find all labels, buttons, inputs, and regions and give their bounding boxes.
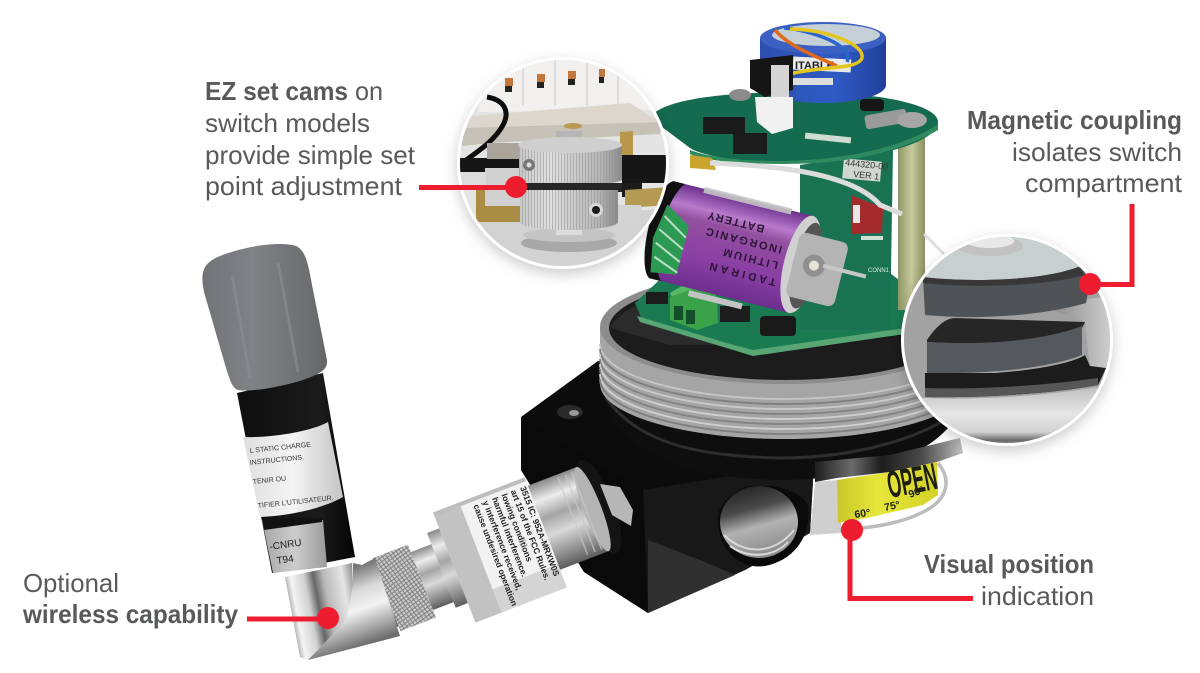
housing interior (600, 270, 970, 384)
label upper: L STATIC CHARGE (249, 442, 312, 455)
label upper: TIFIER L'UTILISATEUR. (257, 495, 334, 510)
text: magnetic coupling: Magnetic coupling (967, 105, 1182, 135)
blue capacitor: ITABLE (795, 60, 834, 72)
vertical circuit board: 444320-00 (845, 157, 889, 172)
wires (775, 28, 862, 74)
text: magnetic coupling: isolates switch (1012, 137, 1182, 167)
vertical circuit board (800, 150, 893, 330)
battery: LITHIUM (722, 246, 780, 271)
dark plate (925, 355, 1106, 397)
grey cap (202, 244, 327, 391)
dial indicator: 60° (854, 507, 871, 521)
label lower: -CNRU (269, 538, 302, 553)
lower circuit board (635, 270, 925, 356)
fitting cylinders (350, 455, 631, 642)
mounting plate (462, 103, 660, 128)
callout: visual position (841, 519, 1094, 611)
text: magnetic coupling: compartment (1025, 168, 1183, 198)
hex body with label: y interference received, (481, 499, 524, 591)
hex body with label (433, 477, 567, 623)
upper circuit board (650, 89, 944, 254)
antenna assembly (202, 244, 636, 660)
text: wireless capability: Optional (23, 568, 119, 598)
mounting clip (600, 484, 633, 526)
text: EZ set cams: on (355, 76, 383, 106)
callout: EZ set cams (205, 76, 527, 201)
leader line (850, 530, 973, 598)
hex body with label: harmful interference. (490, 496, 530, 578)
dot (1079, 273, 1101, 295)
dial indicator: 75° (883, 499, 901, 514)
base plate (478, 210, 654, 266)
silver base (922, 387, 1098, 443)
text: EZ set cams: switch models (205, 108, 370, 138)
hex body with label: lowing conditions (499, 492, 535, 563)
lower magnet (927, 318, 1085, 344)
base disk (521, 238, 617, 252)
dial indicator: 90° (907, 484, 926, 501)
vertical circuit board: VER 1 (853, 169, 880, 182)
text: visual position: indication (981, 581, 1094, 611)
label upper (243, 422, 343, 517)
label lower: T94 (276, 554, 295, 567)
elbow (285, 558, 400, 660)
callout: magnetic coupling (967, 105, 1183, 295)
vertical circuit board: CONN1 (868, 268, 890, 274)
dial indicator: OPEN (884, 456, 941, 507)
terminal block (478, 60, 651, 112)
leader line (247, 616, 328, 622)
battery: TADIRAN (708, 260, 777, 288)
text: visual position: Visual position (924, 549, 1094, 579)
terminal block (670, 283, 718, 330)
support rod (898, 138, 925, 310)
conduit port (718, 486, 809, 566)
dark background parts (460, 158, 520, 172)
callout: wireless capability (22, 568, 339, 629)
text: EZ set cams: provide simple set (205, 140, 416, 170)
magnifier: cams (455, 55, 675, 275)
dot (505, 176, 527, 198)
leader line (1090, 204, 1132, 284)
top magnet (923, 267, 1090, 317)
label upper: INSTRUCTIONS. (249, 454, 304, 467)
text: magnetic coupling (967, 105, 1183, 198)
label lower (262, 518, 327, 573)
housing: black cylinder (606, 375, 962, 480)
dot (317, 607, 339, 629)
coupling body (348, 451, 636, 655)
text: visual position (924, 549, 1094, 611)
text: EZ set cams (205, 76, 416, 201)
connector (750, 55, 793, 134)
hex body with label: art 15 of the FCC Rules. (509, 488, 552, 582)
backing (904, 237, 1110, 443)
lower cam (520, 190, 618, 230)
magnifier: magnets (900, 230, 1120, 450)
product photo: actuator switch box (521, 22, 970, 613)
text: EZ set cams: EZ set cams (205, 76, 348, 106)
hex body with label: cause undesired operation (471, 503, 520, 607)
upper cam (518, 137, 622, 185)
text: EZ set cams: point adjustment (205, 171, 403, 201)
battery: INORGANIC (705, 225, 783, 255)
leader line (419, 185, 516, 190)
text: wireless capability: wireless capability (22, 599, 238, 629)
black tube (237, 373, 355, 573)
blue capacitor (760, 22, 886, 103)
black wire (462, 97, 506, 163)
dial indicator (810, 438, 963, 535)
upper disk (926, 237, 1080, 280)
label upper: TENIR OU (252, 476, 286, 486)
dot (841, 519, 863, 541)
hex body with label: 3515 IC: 952A-MRXW0S (518, 485, 562, 578)
battery (635, 176, 877, 337)
threaded ring (600, 327, 970, 439)
battery: BATTERY (706, 209, 766, 234)
housing: black body (521, 361, 900, 613)
text: wireless capability (22, 568, 238, 629)
